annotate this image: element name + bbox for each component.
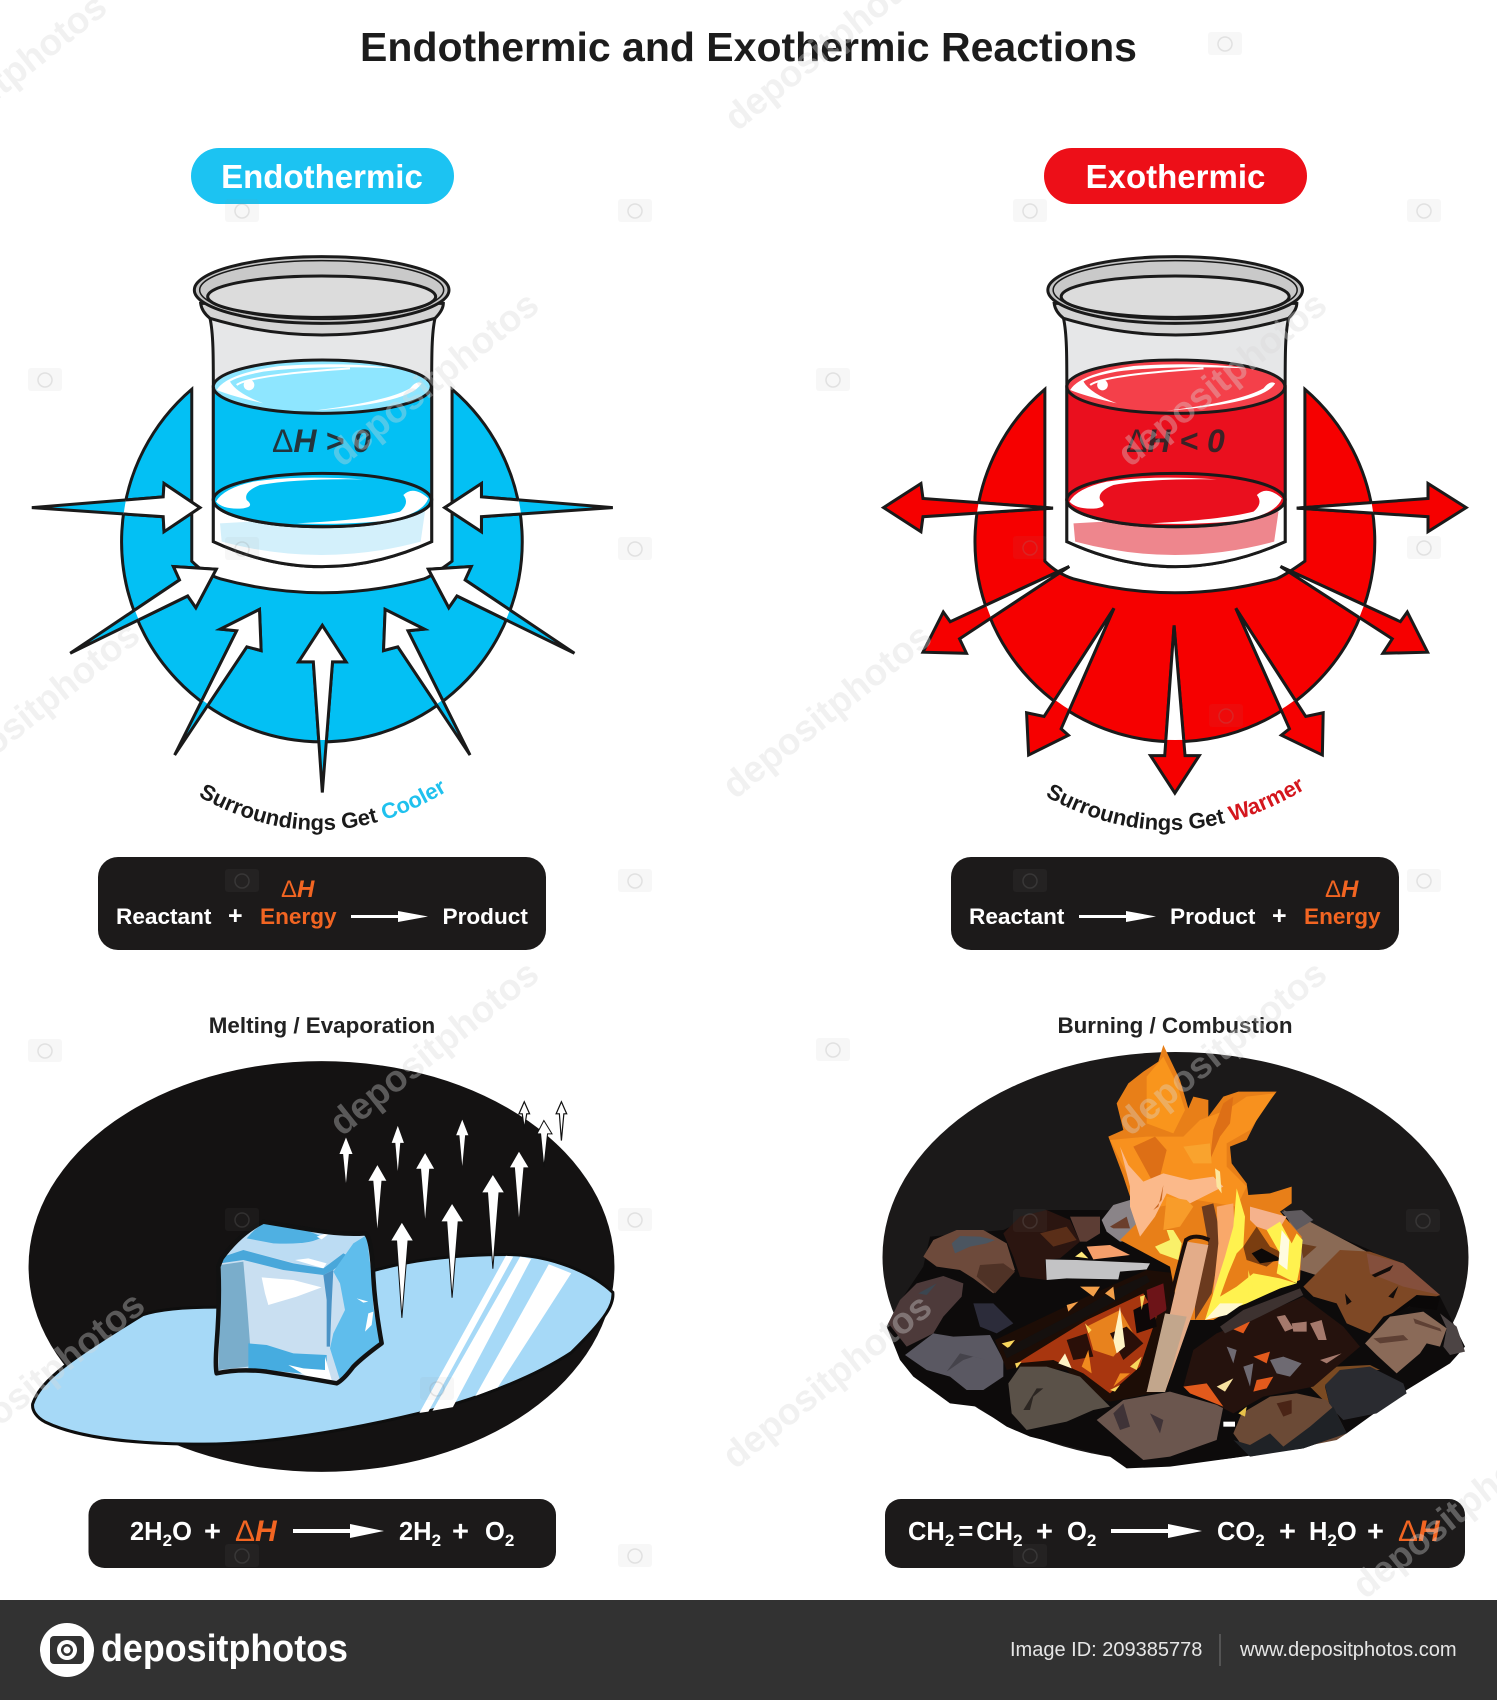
equation: ethylene combustion: 2: [1255, 1531, 1265, 1550]
panel: exothermic beaker diagram: [884, 257, 1466, 793]
watermarks: depositphotos: [321, 283, 546, 474]
heading: burning / combustion: Burning / Combustion: [1057, 1013, 1293, 1038]
footer bar: [0, 1600, 1497, 1700]
equation: ethylene combustion: +: [1036, 1516, 1053, 1548]
footer bar: www.depositphotos.com: [1239, 1639, 1457, 1661]
flames: [1108, 1045, 1303, 1320]
footer bar: Image ID: 209385778: [1010, 1639, 1202, 1661]
equation: water decomposition: +: [204, 1516, 221, 1548]
dark background oval: [882, 1052, 1468, 1462]
ice cube: [216, 1222, 382, 1383]
equation: ethylene combustion: +: [1279, 1516, 1296, 1548]
equation: ethylene combustion: O: [1337, 1518, 1357, 1546]
beaker: endothermic: [194, 257, 449, 567]
equation: ethylene combustion: =: [958, 1518, 973, 1546]
equation: ethylene combustion: 2: [1087, 1531, 1096, 1550]
label: surroundings get warmer: Surroundings Get Warmer: [1047, 779, 1302, 835]
equation: water decomposition: 2: [505, 1531, 514, 1550]
gray log: [1046, 1259, 1150, 1280]
puddle highlights: [419, 1256, 571, 1413]
equation: ethylene combustion: ΔH: [1398, 1515, 1441, 1548]
equation: endothermic general: Energy: [260, 904, 337, 929]
equation: ethylene combustion: [885, 1499, 1465, 1568]
equation: endothermic general: [98, 857, 546, 950]
equation: exothermic general: Product: [1170, 904, 1256, 929]
equation: ethylene combustion: +: [1367, 1516, 1384, 1548]
equation: water decomposition: O: [172, 1518, 192, 1546]
illustration: campfire: [882, 1045, 1468, 1468]
rocks and embers: [887, 1200, 1465, 1468]
equation: ethylene combustion: 2: [1327, 1531, 1337, 1550]
heading pill: exothermic: [1044, 148, 1307, 204]
ember bed: [995, 1270, 1177, 1402]
beaker: exothermic: [1048, 257, 1302, 567]
equation: ethylene combustion: 2: [1013, 1531, 1023, 1550]
surroundings circle: blue: [122, 389, 522, 742]
equation: ethylene combustion: CH: [976, 1518, 1013, 1546]
footer bar: depositphotos: [101, 1628, 348, 1670]
heading pill: exothermic: Exothermic: [1086, 158, 1265, 195]
delta H greater than zero: ΔH > 0: [272, 423, 371, 459]
equation: ethylene combustion: 2: [945, 1531, 954, 1550]
heading pill: endothermic: Endothermic: [221, 158, 423, 195]
equation: water decomposition: ΔH: [235, 1515, 278, 1548]
inward arrows: [32, 483, 613, 793]
equation: water decomposition: 2H: [399, 1518, 432, 1546]
equation: ethylene combustion: CH: [908, 1518, 945, 1546]
delta H less than zero: ΔH < 0: [1126, 423, 1225, 459]
equation: water decomposition: [88, 1499, 556, 1568]
outward arrows: [884, 483, 1466, 793]
puddle: [33, 1254, 613, 1444]
equation: exothermic general: ΔH: [1325, 876, 1359, 903]
burning stick: [1147, 1237, 1209, 1392]
watermarks: depositphotos: [1109, 952, 1334, 1143]
label: surroundings get cooler: Surroundings Get Cooler: [200, 781, 444, 835]
equation: water decomposition: O: [485, 1518, 505, 1546]
equation: water decomposition: 2: [163, 1531, 172, 1550]
panel: endothermic beaker diagram: [32, 257, 613, 793]
equation: endothermic general: +: [228, 902, 243, 930]
right rocks and embers: [1183, 1210, 1465, 1457]
equation: exothermic general: +: [1272, 902, 1287, 930]
equation: endothermic general: Product: [442, 904, 528, 929]
equation: water decomposition: 2: [432, 1531, 441, 1550]
footer logo icon: [40, 1623, 94, 1677]
watermarks: depositphotos: [1109, 283, 1334, 474]
equation: ethylene combustion: H: [1309, 1518, 1327, 1546]
equation: ethylene combustion: O: [1067, 1518, 1087, 1546]
equation: exothermic general: Energy: [1304, 904, 1381, 929]
equation: water decomposition: 2H: [130, 1518, 163, 1546]
watermarks: depositphotos: [714, 615, 939, 806]
watermarks: depositphotos: [321, 952, 546, 1143]
equation: exothermic general: [951, 857, 1399, 950]
surroundings circle: red: [975, 389, 1375, 742]
equation: water decomposition: +: [452, 1516, 469, 1548]
equation: endothermic general: ΔH: [281, 876, 315, 903]
watermarks: depositphotos: [714, 1285, 939, 1476]
equation: ethylene combustion: CO: [1217, 1518, 1255, 1546]
equation: exothermic general: Reactant: [969, 904, 1065, 929]
title: Endothermic and Exothermic Reactions: [360, 24, 1137, 70]
equation: endothermic general: Reactant: [116, 904, 212, 929]
evaporation arrows: [339, 1102, 567, 1318]
illustration: melting ice: [29, 1061, 614, 1472]
heading pill: endothermic: [191, 148, 454, 204]
heading: melting / evaporation: Melting / Evaporation: [209, 1013, 435, 1038]
boulders front: [1008, 1367, 1110, 1430]
